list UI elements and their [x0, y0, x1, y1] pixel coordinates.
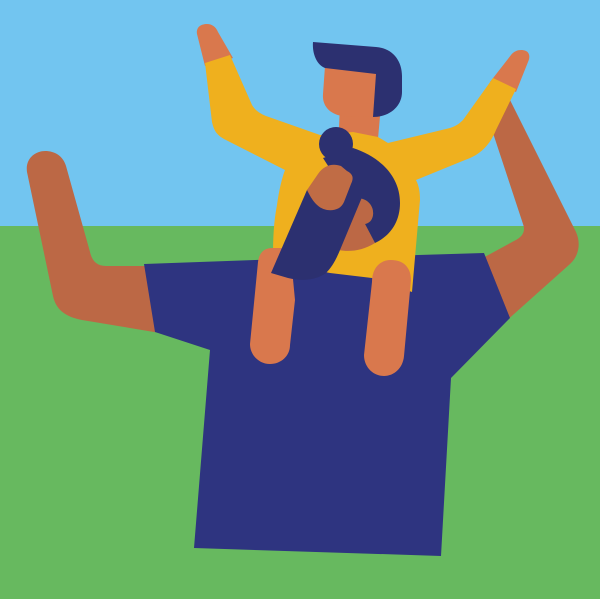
child's right hand — [490, 50, 529, 92]
father's ear and neck — [338, 198, 375, 251]
grass — [0, 226, 600, 599]
child's hair — [313, 42, 402, 117]
father's left arm — [27, 151, 160, 333]
father's right arm — [470, 100, 579, 322]
father's hair and ponytail — [271, 127, 400, 280]
sky — [0, 0, 600, 227]
father's shirt — [144, 253, 510, 556]
father's right leg — [364, 260, 411, 376]
hair bun — [319, 127, 353, 161]
ponytail — [323, 148, 400, 243]
child's left hand — [197, 24, 233, 66]
father's left leg — [250, 248, 295, 364]
hair strand — [271, 170, 365, 280]
child's neck — [338, 105, 381, 150]
father's face — [307, 165, 353, 210]
child's yellow shirt — [205, 55, 516, 292]
child's face — [323, 66, 380, 117]
